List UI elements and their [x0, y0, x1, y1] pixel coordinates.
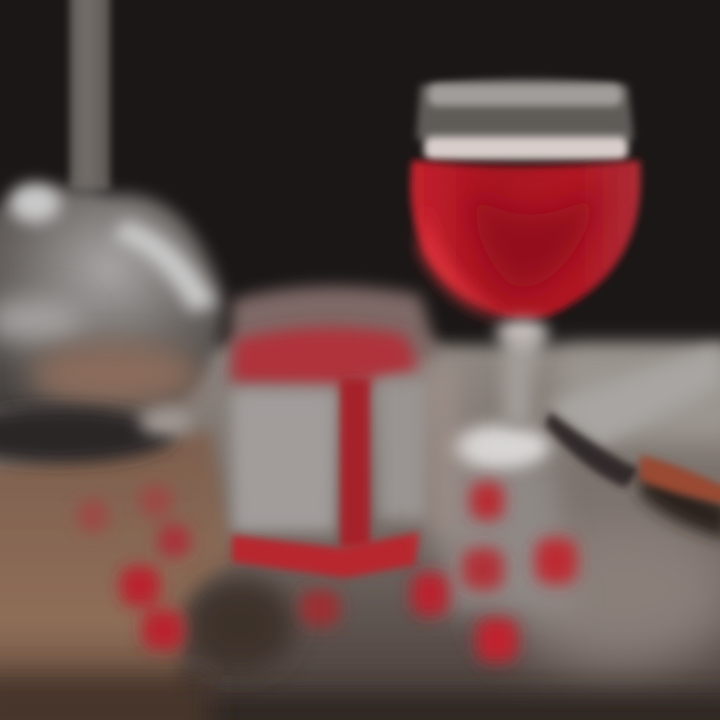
- red and white box: [228, 286, 456, 578]
- box top: [228, 286, 440, 385]
- silver shaker: [0, 0, 223, 463]
- box base: [232, 532, 420, 578]
- glass foot: [440, 460, 575, 610]
- red wine: [410, 160, 641, 320]
- box left panel: [232, 390, 336, 532]
- glass stem: [503, 335, 545, 425]
- wooden board, lower left: [0, 430, 295, 720]
- shaker handle: [70, 0, 110, 190]
- box red ribbon: [340, 378, 370, 548]
- wine glass: [410, 78, 641, 610]
- shaker body: [0, 187, 223, 420]
- glass rim: [416, 78, 634, 140]
- box right panel: [378, 380, 428, 520]
- scattered red cubes: [78, 482, 577, 662]
- knife, right side: [545, 345, 720, 540]
- table surface: [0, 345, 720, 720]
